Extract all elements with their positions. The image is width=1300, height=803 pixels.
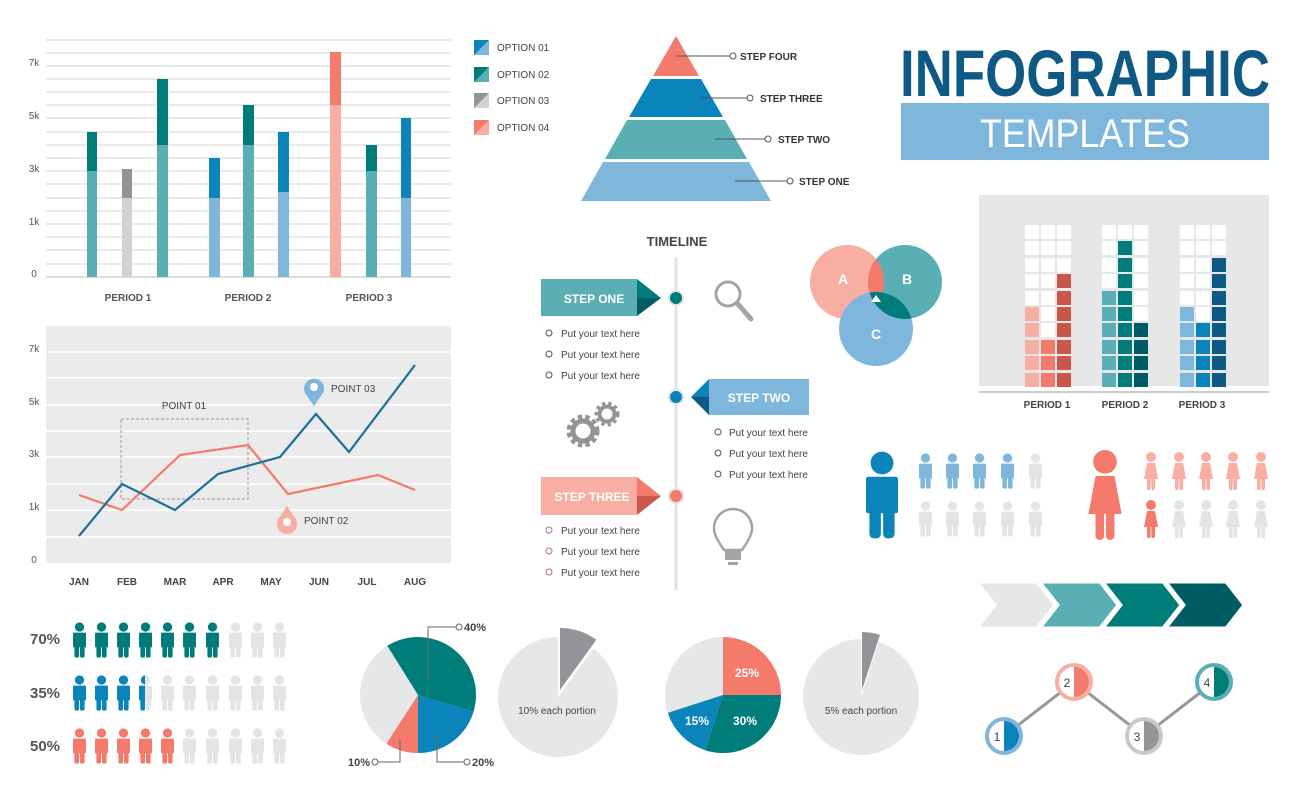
marker: point 03 bbox=[304, 379, 376, 406]
grid chart: PERIOD 1 bbox=[1024, 400, 1071, 411]
grid chart: PERIOD 2 bbox=[1102, 400, 1149, 411]
pie chart 1: 20% bbox=[472, 757, 494, 769]
bar chart: 5k bbox=[29, 111, 40, 122]
step one: Put your text here bbox=[561, 371, 640, 382]
bar chart: PERIOD 1 bbox=[105, 293, 152, 304]
step one: Put your text here bbox=[561, 350, 640, 361]
legend: OPTION 03 bbox=[497, 96, 550, 107]
step one: Put your text here bbox=[561, 329, 640, 340]
line chart: MAR bbox=[164, 577, 187, 588]
pie chart 4: 5% each portion bbox=[825, 706, 897, 717]
people: women bbox=[1088, 450, 1268, 540]
marker: point 03: POINT 03 bbox=[331, 384, 376, 395]
step three: STEP THREE bbox=[554, 490, 630, 504]
people: men bbox=[866, 452, 1042, 538]
icon: gears bbox=[570, 404, 617, 444]
line chart: 3k bbox=[29, 449, 40, 460]
step circles: 4 bbox=[1204, 676, 1211, 690]
line chart: 0 bbox=[31, 555, 37, 566]
pie chart 3: 30% bbox=[733, 714, 757, 728]
bar chart: PERIOD 3 bbox=[346, 293, 393, 304]
step three bbox=[541, 477, 683, 579]
line chart: 1k bbox=[29, 502, 40, 513]
icon: magnifier bbox=[716, 282, 751, 319]
pyramid bbox=[581, 36, 850, 201]
step three: Put your text here bbox=[561, 526, 640, 537]
pyramid: STEP TWO bbox=[778, 135, 830, 146]
line chart: FEB bbox=[117, 577, 137, 588]
line chart: JUL bbox=[358, 577, 376, 588]
step two: Put your text here bbox=[729, 449, 808, 460]
step three: Put your text here bbox=[561, 547, 640, 558]
step circles: 2 bbox=[1064, 676, 1071, 690]
step circles bbox=[987, 665, 1231, 753]
step one bbox=[541, 279, 683, 382]
line chart: APR bbox=[212, 577, 234, 588]
timeline: TIMELINE bbox=[647, 234, 708, 249]
bar chart bbox=[29, 40, 451, 304]
bar chart: 7k bbox=[29, 58, 40, 69]
pie chart 3: 25% bbox=[735, 666, 759, 680]
pie chart 4 bbox=[803, 632, 919, 755]
step circles: 1 bbox=[994, 730, 1001, 744]
pyramid: STEP FOUR bbox=[740, 52, 798, 63]
legend bbox=[474, 40, 550, 135]
step three: Put your text here bbox=[561, 568, 640, 579]
bar chart: 3k bbox=[29, 164, 40, 175]
step one: STEP ONE bbox=[564, 292, 624, 306]
venn diagram bbox=[810, 245, 942, 366]
pie chart 3 bbox=[665, 637, 781, 753]
step two: STEP TWO bbox=[728, 391, 790, 405]
people percentage rows: 70% bbox=[30, 631, 60, 648]
legend: OPTION 04 bbox=[497, 123, 550, 134]
grid chart bbox=[979, 195, 1269, 411]
icon: light bulb bbox=[714, 509, 752, 565]
marker: point 02 bbox=[277, 506, 349, 534]
line chart: 5k bbox=[29, 397, 40, 408]
pyramid: STEP ONE bbox=[799, 177, 850, 188]
line chart: POINT 01 bbox=[162, 401, 207, 412]
legend: OPTION 02 bbox=[497, 70, 550, 81]
venn diagram: B bbox=[902, 271, 912, 287]
legend: OPTION 01 bbox=[497, 43, 550, 54]
timeline bbox=[541, 234, 809, 590]
grid chart: PERIOD 3 bbox=[1179, 400, 1226, 411]
pie chart 2 bbox=[498, 628, 618, 757]
bar chart: PERIOD 2 bbox=[225, 293, 272, 304]
line chart: JAN bbox=[69, 577, 89, 588]
bar chart: 1k bbox=[29, 217, 40, 228]
step two: Put your text here bbox=[729, 428, 808, 439]
chevron process arrows bbox=[977, 582, 1244, 628]
line chart: MAY bbox=[260, 577, 282, 588]
marker: point 02: POINT 02 bbox=[304, 516, 349, 527]
pie chart 1: 10% bbox=[348, 757, 370, 769]
pie chart 2: 10% each portion bbox=[518, 706, 596, 717]
people percentage rows: 50% bbox=[30, 738, 60, 755]
title bbox=[900, 36, 1270, 160]
pie chart 1 bbox=[348, 622, 494, 769]
title: TEMPLATES bbox=[980, 112, 1190, 156]
pyramid: STEP THREE bbox=[760, 94, 823, 105]
line chart: JUN bbox=[309, 577, 329, 588]
step circles: 3 bbox=[1134, 730, 1141, 744]
line chart: AUG bbox=[404, 577, 426, 588]
pie chart 3: 15% bbox=[685, 714, 709, 728]
bar chart: 0 bbox=[31, 269, 37, 280]
venn diagram: A bbox=[838, 271, 848, 287]
step two: Put your text here bbox=[729, 470, 808, 481]
people percentage rows: 35% bbox=[30, 685, 60, 702]
line chart bbox=[29, 326, 451, 588]
venn diagram: C bbox=[871, 326, 881, 342]
pie chart 1: 40% bbox=[464, 622, 486, 634]
people percentage rows bbox=[30, 622, 286, 764]
step two bbox=[669, 379, 809, 481]
line chart: 7k bbox=[29, 344, 40, 355]
